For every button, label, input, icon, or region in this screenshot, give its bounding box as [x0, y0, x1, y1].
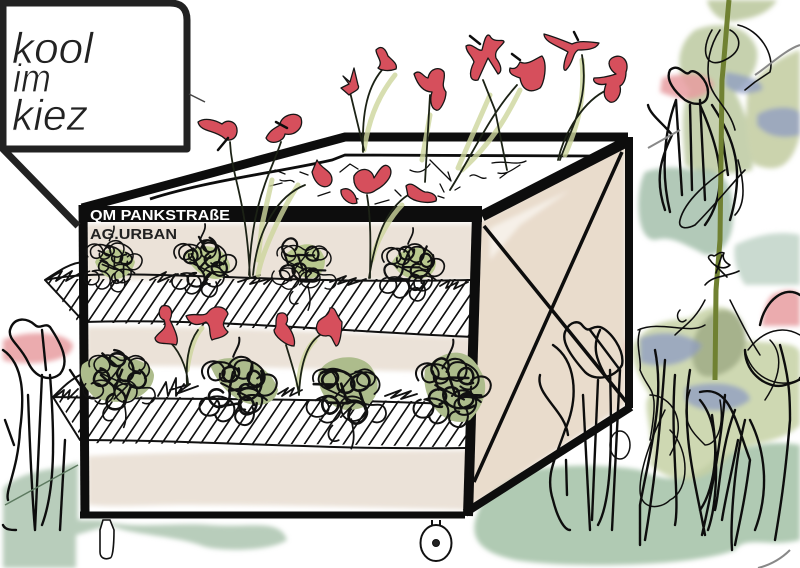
flower right top — [648, 68, 737, 225]
frame front right post — [468, 215, 477, 516]
wash: sage foliage right — [746, 50, 800, 168]
herbs upper row — [84, 224, 444, 310]
flower: F3 — [312, 160, 332, 187]
wheel right — [420, 520, 452, 561]
bubble stub marks — [189, 94, 205, 102]
leaf washes — [187, 60, 583, 385]
frame diagonals — [474, 152, 628, 482]
frame side top — [482, 142, 626, 216]
flower centre — [539, 322, 622, 530]
flower: F11 — [544, 34, 599, 70]
flower: F7 — [406, 184, 436, 202]
beige band top — [86, 224, 474, 280]
flower: F13 — [155, 306, 177, 345]
flower: F1 — [198, 119, 237, 140]
frame left post — [83, 205, 85, 516]
flower: F15 — [274, 313, 295, 346]
flower left — [3, 320, 80, 530]
upper shelf — [45, 262, 472, 337]
flower right edge — [745, 292, 800, 386]
wash: sage foliage top — [679, 25, 757, 173]
vine tendrils — [680, 25, 771, 228]
wash: ground left — [3, 462, 287, 568]
flower: F14 — [186, 307, 228, 340]
wash: sage top cap — [707, 0, 777, 21]
frame side right post — [625, 137, 633, 408]
flower: F12 — [594, 56, 627, 102]
beige band middle — [87, 327, 474, 372]
flower: small — [341, 189, 357, 204]
flower: F4 — [341, 68, 359, 95]
dense scribble lower — [56, 378, 417, 399]
flower right grass — [640, 345, 790, 550]
flower: F8 — [414, 69, 446, 110]
herb scribbles — [84, 224, 444, 310]
flower right lower foliage — [638, 300, 800, 507]
herbs lower row — [81, 338, 491, 449]
hatching upper — [45, 279, 470, 336]
flower: F16 — [316, 308, 342, 346]
side panel lighter patch — [490, 190, 570, 260]
herb wash — [81, 353, 485, 422]
frame back and top edges — [82, 137, 628, 208]
wash: teal lower right top — [734, 233, 800, 285]
lower shelf — [53, 375, 470, 448]
frame side bottom — [465, 407, 631, 513]
flower: F9 — [466, 35, 504, 80]
frame bottom bar — [80, 512, 465, 518]
shelf outline upper — [45, 262, 472, 337]
wheel back — [610, 431, 630, 459]
flower dark marks — [218, 32, 578, 150]
grey branch left — [5, 465, 78, 505]
wash: pink petals — [3, 74, 800, 364]
label: AG.URBAN: AG.URBAN — [90, 226, 177, 243]
bubble title text — [12, 24, 94, 140]
wash: dark green patch — [638, 168, 733, 255]
herb wash — [95, 244, 436, 279]
flower: F6 — [354, 165, 391, 193]
wheels — [100, 431, 630, 561]
side panel — [466, 142, 626, 510]
speech bubble label — [3, 0, 205, 226]
flower: F10 — [510, 56, 545, 91]
flower: F2 — [266, 114, 302, 142]
wash: mid foliage — [632, 307, 800, 479]
planter front panel — [86, 142, 626, 510]
bubble title text: im — [13, 57, 51, 101]
dense scribble upper — [48, 271, 468, 289]
bubble outline with tail — [3, 0, 187, 226]
frame inner rim — [150, 155, 590, 199]
wash: ground centre — [474, 443, 800, 565]
grey branch lines — [648, 45, 800, 568]
beige band bottom — [88, 450, 474, 510]
label: QM Pankstraße: QM PANKSTRAßE — [90, 207, 230, 224]
shelf outline lower — [53, 375, 470, 448]
flower: F5 — [376, 48, 396, 71]
wash: blue petals — [640, 72, 800, 411]
hatching lower — [55, 395, 470, 447]
flowers in planter — [155, 32, 627, 395]
stems — [170, 55, 607, 395]
vine stalk — [715, 0, 729, 380]
small flower mid vine — [705, 253, 739, 285]
bubble title text: kool — [12, 24, 94, 73]
soil specks — [270, 160, 526, 204]
bubble title text: kiez — [12, 91, 88, 140]
planter frame — [80, 137, 631, 516]
wheel left — [100, 520, 114, 559]
herb scribbles — [83, 338, 491, 449]
frame top front bar — [80, 206, 482, 222]
wash: sage centre — [692, 310, 746, 377]
